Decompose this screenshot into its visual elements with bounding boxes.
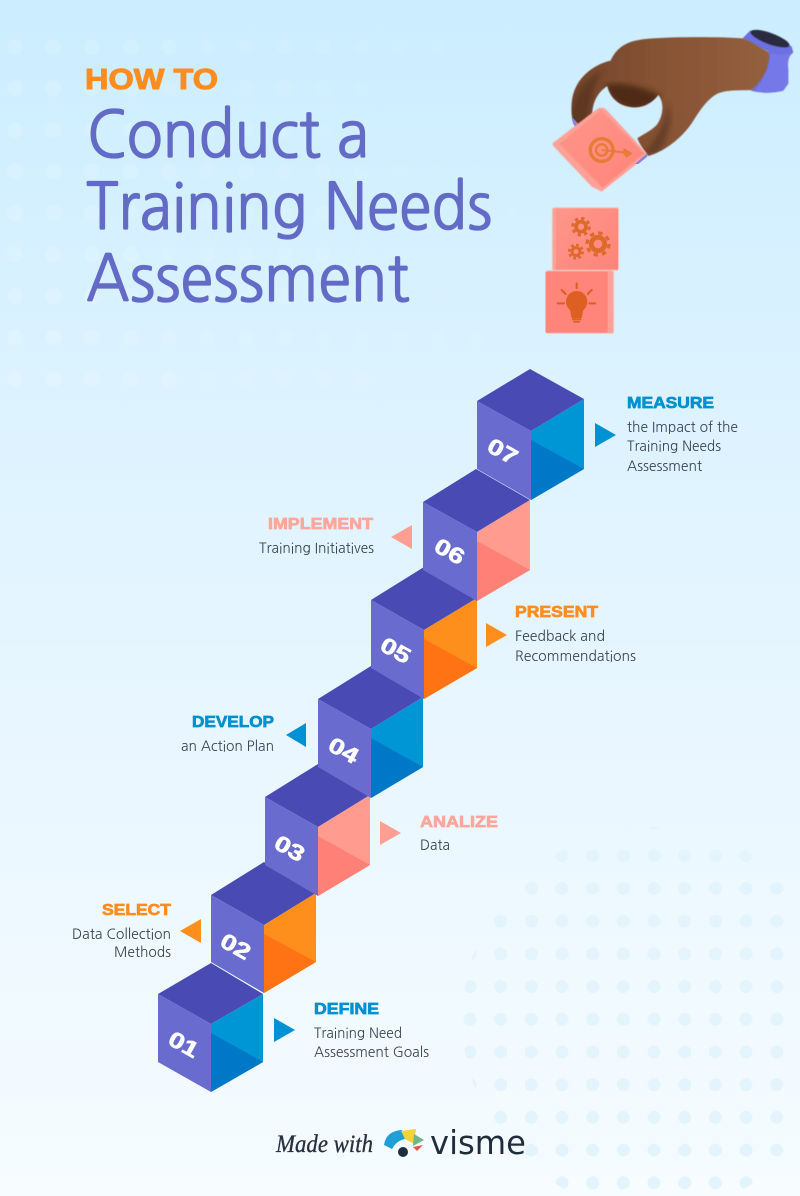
label: implement: IMPLEMENT bbox=[268, 516, 373, 533]
arrow 01 bbox=[274, 1018, 295, 1042]
step 03 cube bbox=[265, 764, 370, 896]
arrow 03 bbox=[380, 821, 401, 845]
label: measure: the Impact of the bbox=[627, 420, 738, 435]
footer: made with visme: Made with bbox=[275, 1131, 373, 1158]
step 02 cube: 02 bbox=[216, 928, 255, 965]
label: present: Feedback and bbox=[515, 629, 605, 644]
step 03 cube: 03 bbox=[270, 830, 309, 867]
label: present: PRESENT bbox=[515, 604, 598, 621]
background dots: top left bbox=[0, 26, 520, 394]
label: measure bbox=[627, 395, 738, 474]
title: Assessment bbox=[86, 247, 409, 311]
footer: made with visme: visme bbox=[430, 1123, 526, 1162]
label: measure: MEASURE bbox=[627, 395, 714, 412]
label: measure: Training Needs bbox=[627, 439, 721, 454]
label: analize: Data bbox=[420, 839, 450, 853]
icon: target bbox=[590, 139, 632, 161]
label: develop bbox=[181, 714, 274, 754]
label: measure: Assessment bbox=[627, 460, 703, 474]
heading: how to: HOW TO bbox=[85, 64, 218, 96]
arrow 05 bbox=[486, 623, 507, 647]
label: analize: ANALIZE bbox=[420, 814, 498, 831]
icon: bulb bbox=[558, 283, 595, 323]
label: develop: an Action Plan bbox=[181, 739, 274, 754]
label: select bbox=[72, 902, 171, 960]
label: select: SELECT bbox=[102, 902, 171, 919]
label: present: Recommendations bbox=[515, 649, 636, 664]
fingertip shadow bbox=[572, 117, 582, 129]
footer: made with visme bbox=[275, 1123, 526, 1162]
block: gears bbox=[552, 208, 619, 270]
label: analize bbox=[420, 814, 498, 853]
block: light bulb bbox=[546, 271, 614, 333]
step 02 cube bbox=[211, 862, 316, 993]
arrow 02 bbox=[180, 919, 201, 943]
step 04 cube: 04 bbox=[324, 732, 364, 769]
background dots: bottom right bbox=[462, 827, 800, 1196]
title bbox=[86, 103, 492, 311]
step 07 cube: 07 bbox=[483, 433, 522, 470]
arrow 06 bbox=[391, 525, 412, 549]
title: Conduct a bbox=[87, 103, 369, 167]
label: define bbox=[314, 1001, 429, 1060]
label: present bbox=[515, 604, 636, 664]
watch bbox=[743, 26, 793, 93]
label: define: Training Need bbox=[314, 1026, 402, 1041]
label: define: Assessment Goals bbox=[314, 1045, 429, 1060]
label: select: Methods bbox=[114, 945, 171, 960]
step 04 cube bbox=[318, 666, 423, 798]
block: target bbox=[552, 108, 647, 192]
icon: visme logo bbox=[384, 1129, 424, 1157]
icon: gears bbox=[569, 218, 609, 258]
step 05 cube bbox=[371, 567, 477, 699]
step 07 cube bbox=[477, 369, 584, 500]
label: implement bbox=[259, 516, 374, 556]
label: define: DEFINE bbox=[314, 1001, 379, 1018]
label: implement: Training Initiatives bbox=[259, 542, 374, 556]
step 06 cube: 06 bbox=[430, 533, 469, 570]
arrow 04 bbox=[286, 723, 306, 747]
title: Training Needs bbox=[86, 175, 492, 239]
step 01 cube: 01 bbox=[164, 1026, 203, 1063]
label: develop: DEVELOP bbox=[192, 714, 274, 731]
step 06 cube bbox=[423, 469, 530, 601]
step 01 cube bbox=[158, 963, 263, 1092]
step 05 cube: 05 bbox=[376, 632, 415, 669]
hand bbox=[570, 37, 769, 157]
label: select: Data Collection bbox=[72, 927, 171, 942]
illustration: hand with blocks bbox=[546, 26, 793, 333]
arrow 07 bbox=[595, 423, 616, 447]
